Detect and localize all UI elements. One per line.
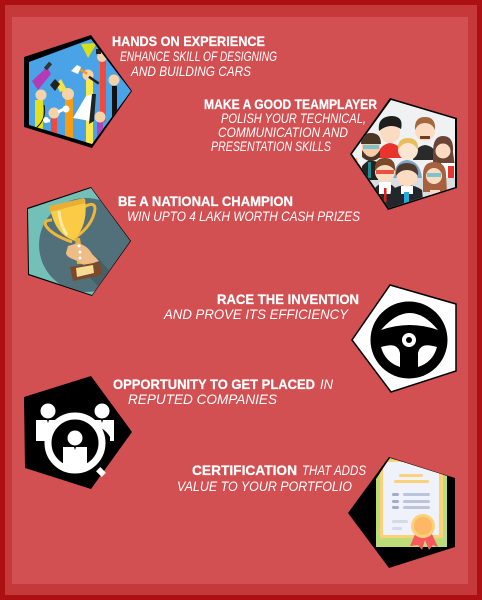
heading: RACE THE INVENTION bbox=[217, 291, 359, 307]
description: AND BUILDING CARS bbox=[130, 63, 252, 79]
icon: hands with tools bbox=[24, 35, 132, 148]
heading: IN bbox=[320, 376, 334, 392]
description: COMMUNICATION AND bbox=[218, 124, 348, 140]
description: ENHANCE SKILL OF DESIGNING bbox=[120, 48, 277, 64]
panel: national champion bbox=[25, 185, 361, 300]
heading: BE A NATIONAL CHAMPION bbox=[118, 193, 293, 209]
description bbox=[211, 110, 366, 154]
icon: group of people bbox=[345, 95, 460, 210]
heading: HANDS ON EXPERIENCE bbox=[112, 33, 265, 49]
heading: THAT ADDS bbox=[302, 462, 367, 478]
description: REPUTED COMPANIES bbox=[128, 391, 278, 407]
icon: magnifier over people bbox=[24, 376, 132, 489]
panel: teamplayer bbox=[204, 95, 460, 210]
heading: CERTIFICATION bbox=[192, 462, 297, 478]
icon: steering wheel bbox=[352, 285, 456, 392]
description: VALUE TO YOUR PORTFOLIO bbox=[177, 478, 352, 494]
description: WIN UPTO 4 LAKH WORTH CASH PRIZES bbox=[127, 208, 361, 224]
description: AND PROVE ITS EFFICIENCY bbox=[163, 306, 350, 322]
panel: hands on experience bbox=[24, 35, 277, 148]
panel: placement opportunity bbox=[24, 376, 334, 489]
heading: MAKE A GOOD TEAMPLAYER bbox=[204, 96, 377, 112]
heading: OPPORTUNITY TO GET PLACED bbox=[113, 376, 315, 392]
panel: certification bbox=[177, 455, 455, 568]
description bbox=[120, 48, 277, 79]
heading bbox=[192, 462, 367, 478]
panel: race the invention bbox=[163, 285, 456, 392]
icon: trophy in hand bbox=[27, 187, 131, 296]
icon: certificate bbox=[348, 455, 455, 568]
description: POLISH YOUR TECHNICAL, bbox=[221, 110, 366, 126]
description: PRESENTATION SKILLS bbox=[211, 138, 331, 154]
